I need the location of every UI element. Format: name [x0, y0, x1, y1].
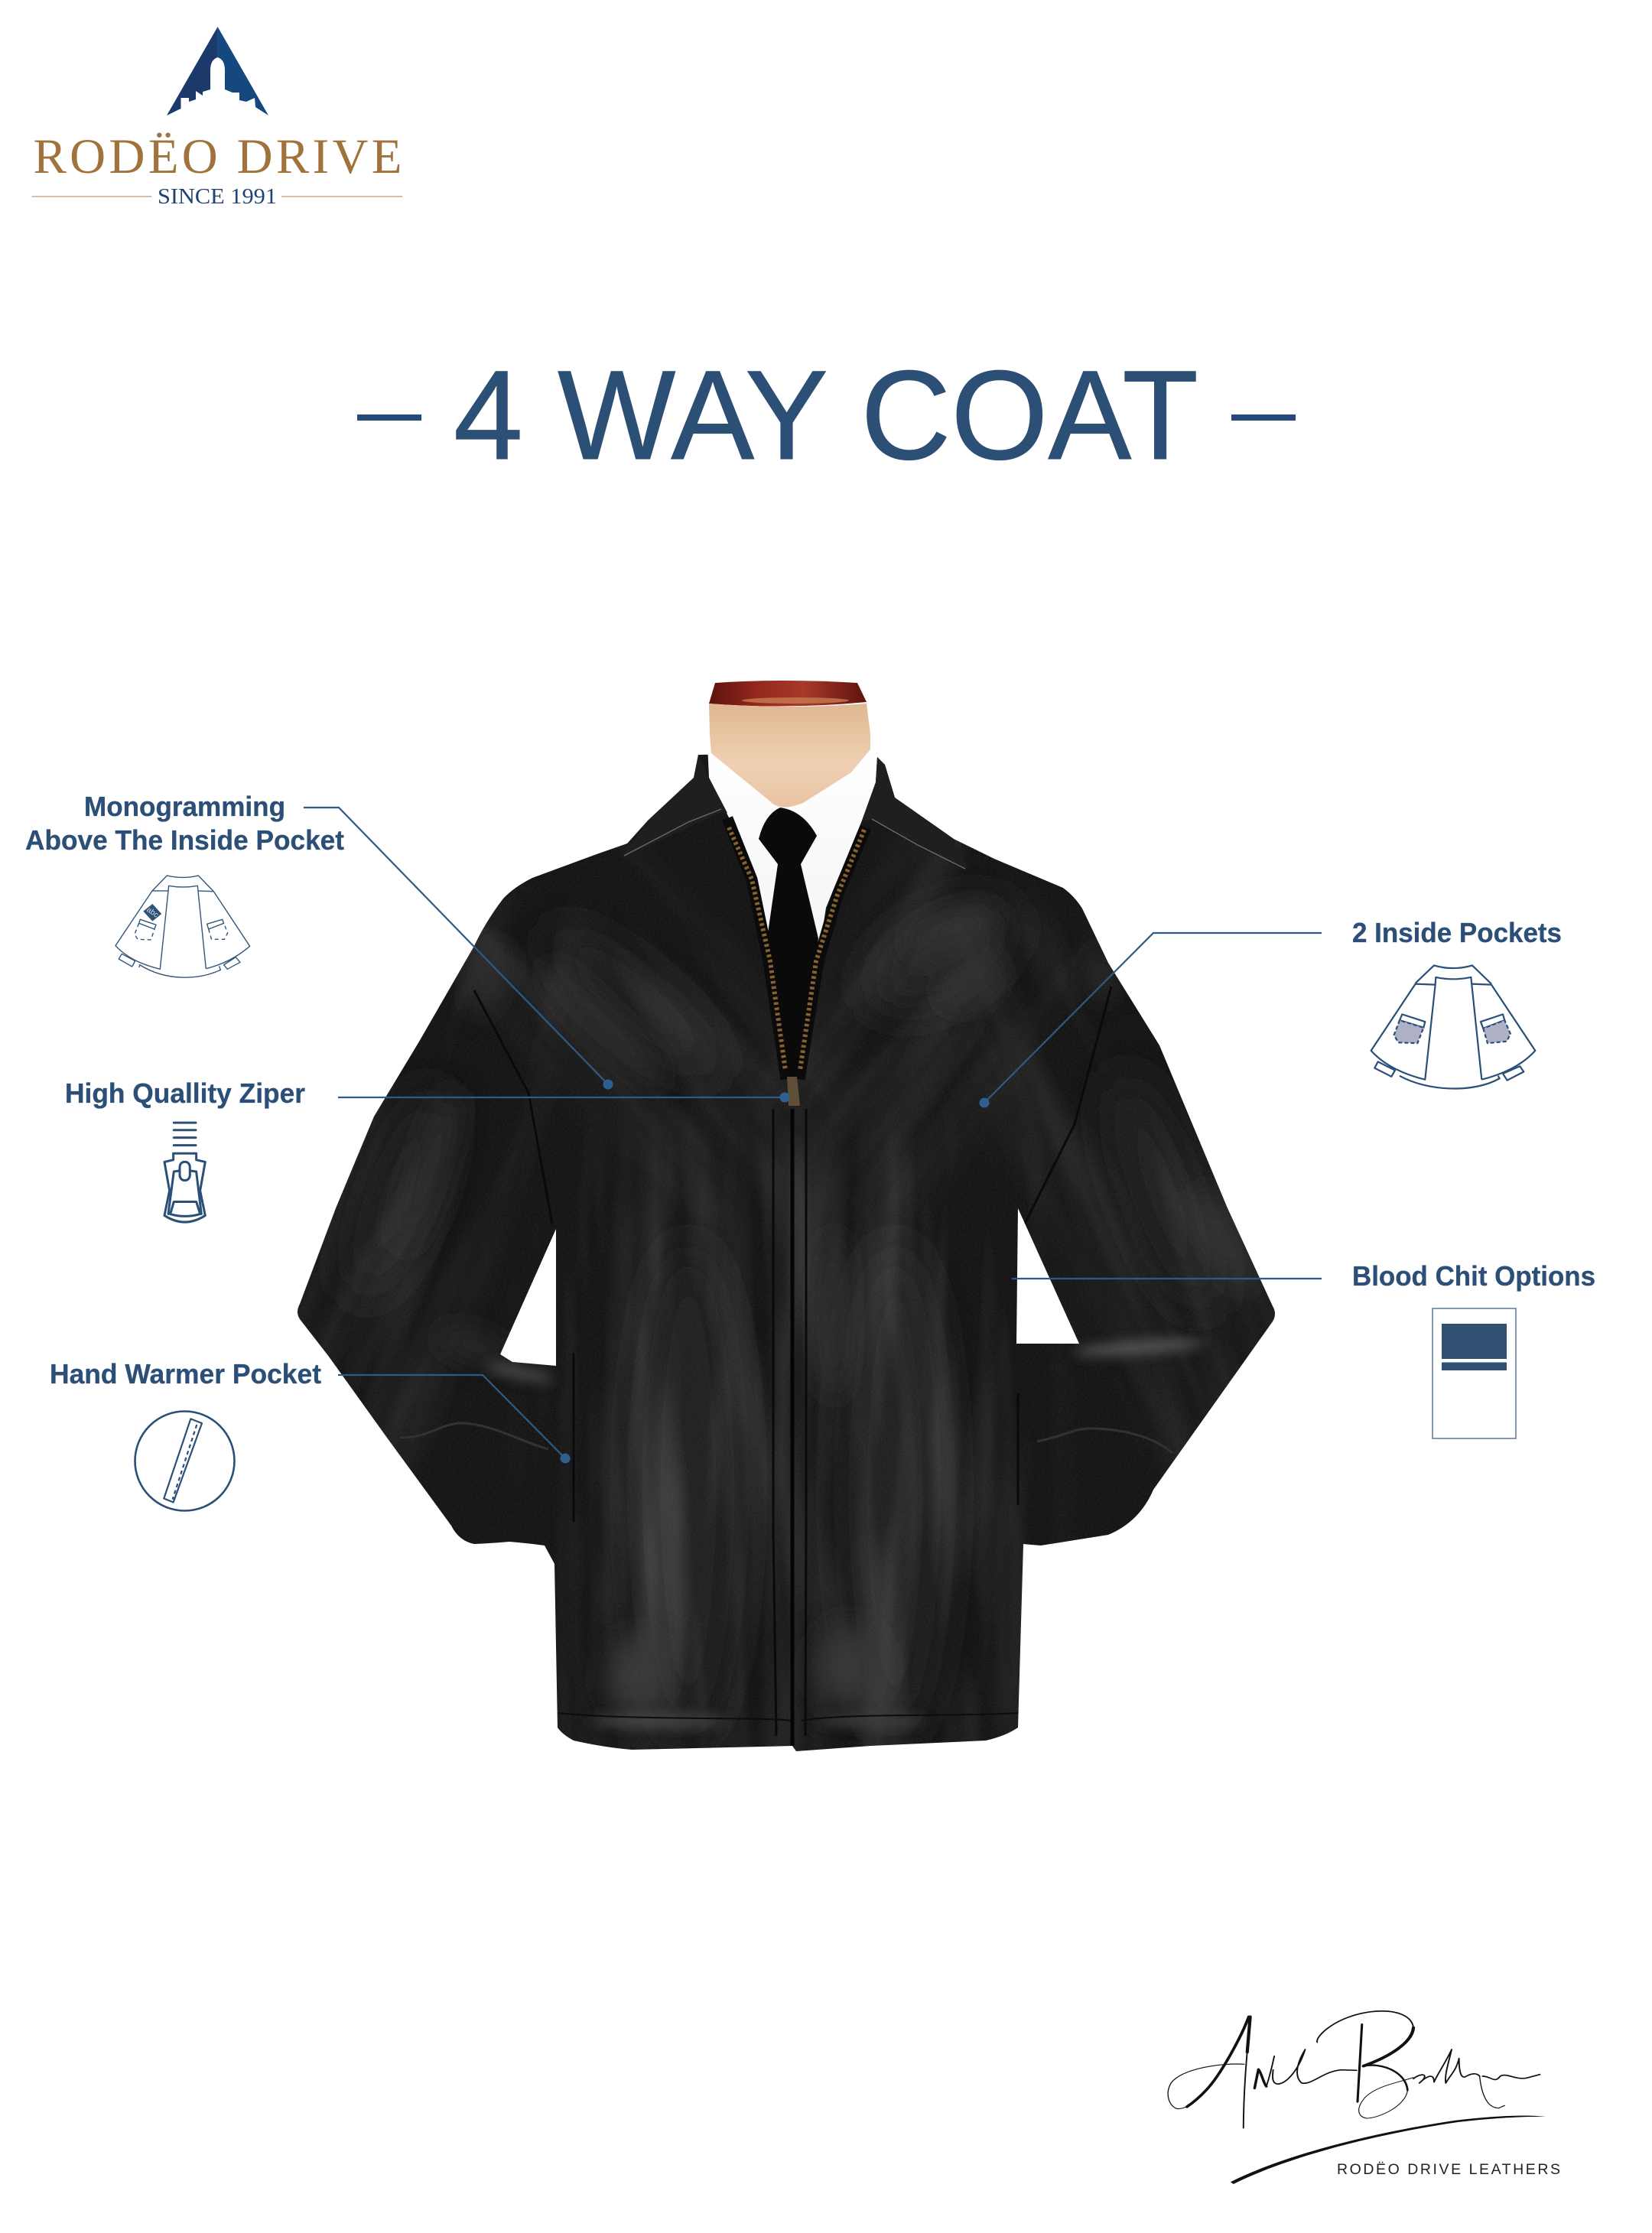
label: blood chit options: Blood Chit Options — [1352, 1260, 1595, 1292]
mannequin cap — [709, 681, 867, 707]
jacket collar left — [621, 755, 727, 859]
jacket seams — [400, 986, 1172, 1736]
label: zipper: High Quallity Ziper — [65, 1077, 305, 1109]
label: monogramming: Monogramming — [84, 791, 285, 822]
jacket body — [298, 753, 1275, 1751]
monogram badge: abc — [145, 905, 160, 920]
zipper pull — [787, 1077, 800, 1106]
jacket on mannequin — [177, 681, 1384, 1759]
zipper teeth — [729, 827, 864, 1071]
line: hand warmer — [338, 1375, 571, 1464]
leather streak texture — [298, 756, 1275, 1751]
jacket opening: zipper backing — [727, 818, 866, 1079]
signature — [1168, 2011, 1546, 2184]
signature caption: RODËO DRIVE LEATHERS — [1337, 2161, 1560, 2178]
monogram badge — [143, 904, 161, 921]
shirt — [707, 743, 877, 1079]
logo tagline: SINCE 1991 — [158, 185, 277, 209]
logo wordmark: RODËO DRIVE — [34, 129, 402, 184]
icon: blood chit — [1432, 1308, 1516, 1438]
label: hand warmer pocket: Hand Warmer Pocket — [50, 1358, 321, 1390]
jacket collar right — [862, 757, 969, 869]
center zip closure line — [791, 1109, 794, 1746]
line: zipper — [338, 1092, 789, 1103]
label: monogramming — [25, 791, 344, 856]
logo: Rodeo Drive — [32, 27, 402, 209]
logo mark: peak — [167, 27, 268, 115]
icon: inside pockets — [1371, 965, 1535, 1089]
label: 2 inside pockets: 2 Inside Pockets — [1352, 917, 1562, 948]
label: monogramming: Above The Inside Pocket — [25, 824, 344, 856]
necktie — [759, 808, 818, 1079]
line: inside pockets — [979, 933, 1322, 1107]
line: blood chit — [1012, 1278, 1322, 1279]
mannequin neck — [709, 704, 870, 808]
jacket leather shading — [298, 756, 1275, 1751]
icon: hand warmer pocket — [135, 1412, 234, 1511]
icon: zipper — [164, 1123, 205, 1222]
title: 4 WAY COAT — [454, 345, 1198, 486]
callout lines — [304, 808, 1322, 1464]
line: monogramming — [304, 808, 613, 1089]
icon: open jacket with monogram — [115, 876, 250, 977]
